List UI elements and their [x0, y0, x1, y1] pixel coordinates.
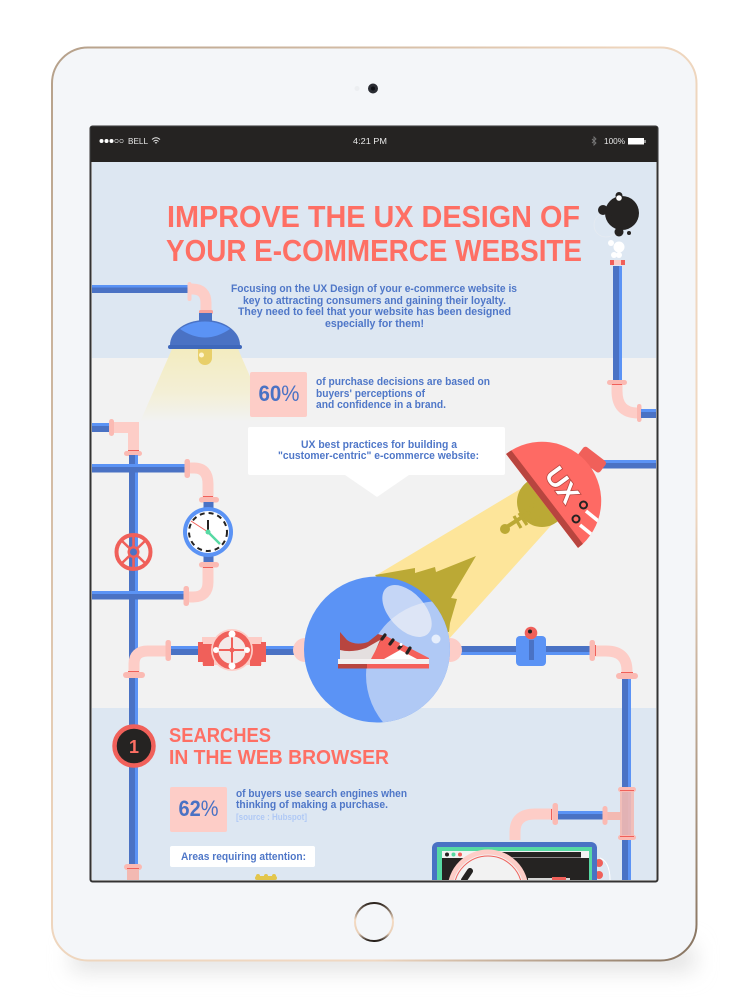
beam shadow: [375, 556, 476, 632]
ceiling lamp: [168, 313, 242, 365]
label: areas requiring attention: Areas requiring attention:: [181, 851, 306, 863]
magnifier: [448, 850, 570, 880]
label: areas requiring attention: [170, 846, 315, 867]
stat text: purchase decisions: [316, 377, 490, 408]
intro text: Focusing on the UX Design of your e-commerce website is: [231, 283, 517, 295]
pipe: UX lamp feed: [590, 460, 656, 468]
stat text: search engines: of buyers use search engines when: [236, 788, 407, 800]
UX lamp bulb: [500, 482, 558, 534]
stat text: search engines: [236, 788, 407, 823]
shoe: [338, 632, 429, 668]
status bar: 4:21 PM: [353, 136, 387, 146]
status bar: 100%: [604, 136, 625, 146]
front camera: [354, 84, 378, 94]
pipe: upper right: [607, 260, 656, 422]
icon: pressure gauge: [183, 502, 233, 562]
pipe: right of globe: [458, 640, 638, 880]
light beam: [375, 485, 556, 640]
title: IMPROVE THE UX DESIGN OF: [167, 199, 580, 234]
pipe: lower left to valve: [123, 640, 301, 880]
status bar: BELL: [128, 136, 148, 146]
stat text: purchase decisions: and confidence in a brand.: [316, 399, 446, 411]
icon: yellow pipe fragment: [255, 874, 277, 880]
screen frame: [90, 126, 658, 882]
home button: [355, 903, 393, 941]
browser window illustration: [432, 842, 610, 880]
title: YOUR E-COMMERCE WEBSITE: [166, 233, 582, 268]
light cone from ceiling lamp: [144, 349, 250, 414]
intro text: especially for them!: [325, 318, 424, 330]
panel: statistics background: [92, 358, 656, 708]
section 1 heading: [170, 728, 388, 764]
section 1 heading: SEARCHES: [169, 725, 271, 747]
infographic viewport: [92, 162, 656, 928]
pipe joint balloons: [293, 638, 462, 662]
callout: "customer-centric" e-commerce website:: [278, 450, 479, 462]
intro text: [231, 283, 517, 330]
UX lamp: [506, 442, 607, 548]
icon: red gate valve: [198, 629, 266, 671]
pipe network: left: [92, 419, 219, 880]
section 1 number badge: [114, 726, 154, 766]
section 1 number badge: 1: [129, 737, 139, 757]
tablet shadow: [72, 945, 694, 971]
globe: [304, 576, 450, 722]
panel: section 1 background: [92, 708, 656, 880]
section 1 heading: IN THE WEB BROWSER: [169, 747, 390, 769]
status bar: [91, 127, 657, 162]
stat box: 62%: [170, 787, 227, 832]
stat text: search engines: [source : Hubspot]: [236, 812, 307, 823]
UX label: UX: [539, 461, 585, 509]
pipe: lamp feed: [92, 282, 213, 314]
intro text: They need to feel that your website has been designed: [238, 306, 511, 318]
title: [166, 206, 581, 262]
panel: header background: [92, 162, 656, 358]
callout: [248, 427, 505, 497]
icon: red wheel valve: [116, 535, 150, 569]
icon: black smoke cloud: [594, 192, 639, 258]
stat text: purchase decisions: buyers' perceptions of: [316, 388, 425, 400]
stat text: purchase decisions: of purchase decisions are based on: [316, 376, 490, 388]
stat text: search engines: thinking of making a purchase.: [236, 799, 388, 811]
intro text: key to attracting consumers and gaining their loyalty.: [243, 295, 506, 307]
stat box: 60%: [250, 372, 307, 417]
stat box: 62%: 62%: [178, 796, 218, 821]
pipe: browser feed: [515, 787, 636, 840]
stat box: 60%: 60%: [258, 381, 300, 406]
icon: joystick switch: [516, 627, 546, 666]
callout: UX best practices for building a: [301, 439, 458, 451]
